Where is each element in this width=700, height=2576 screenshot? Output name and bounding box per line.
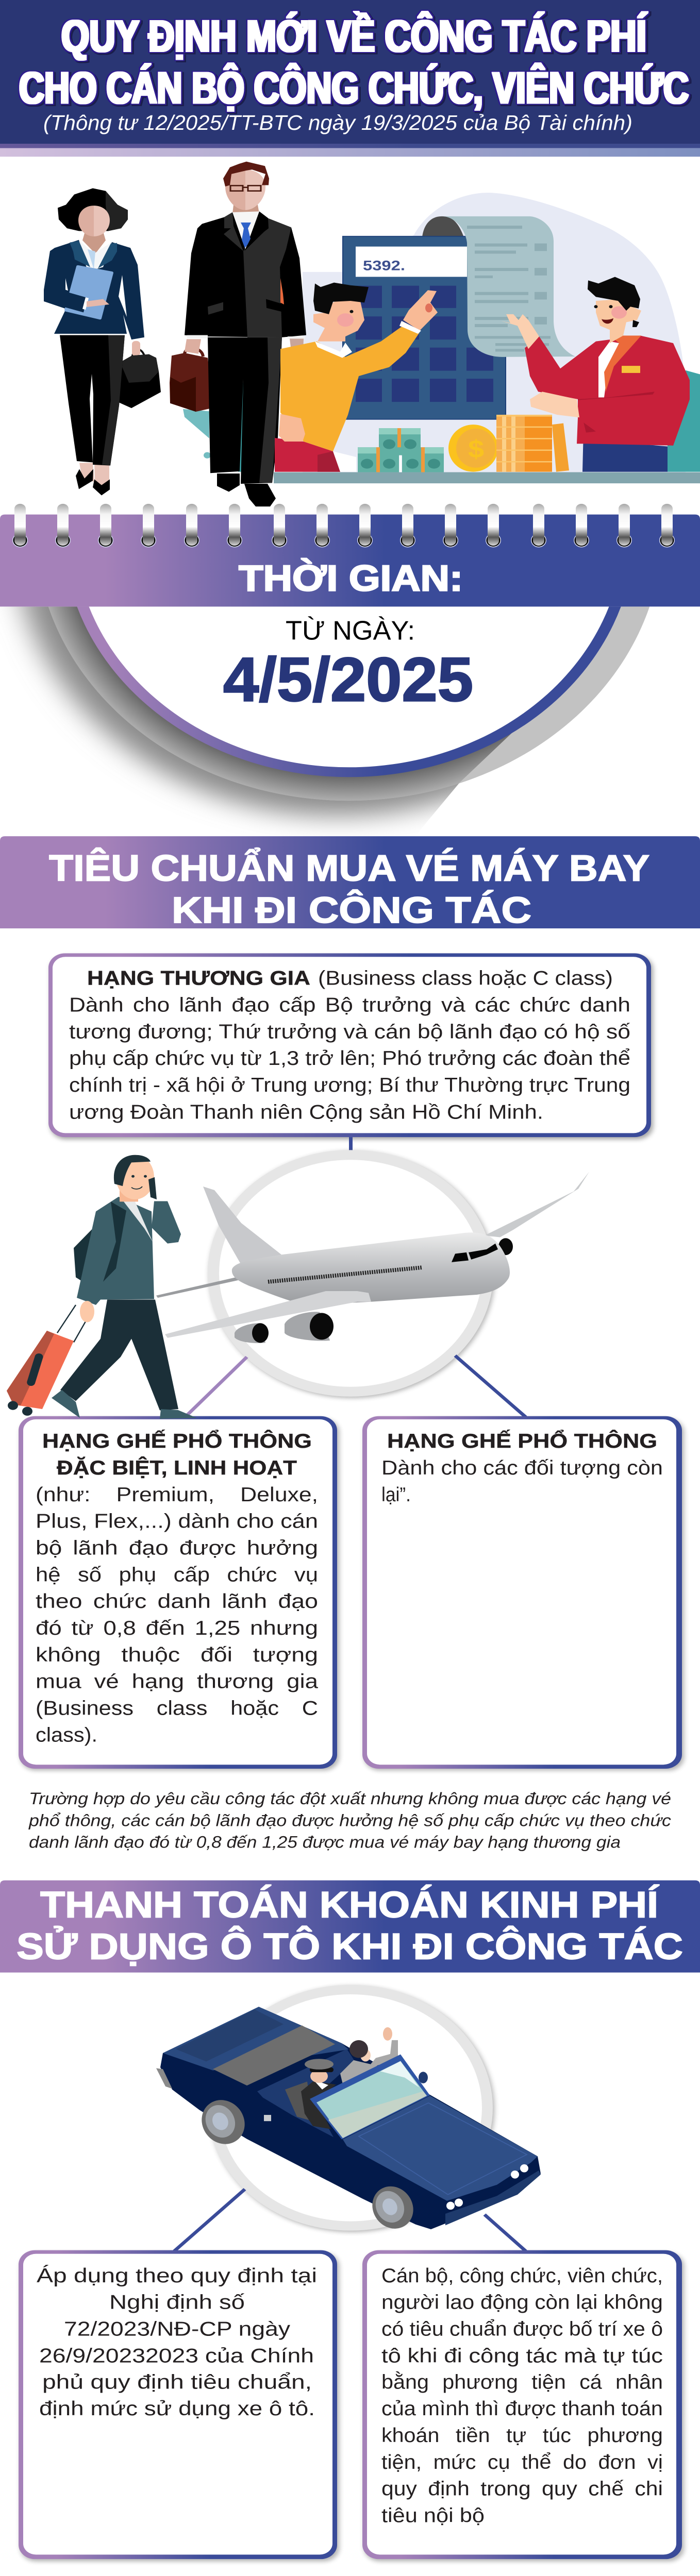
note: urgent travel exception [28,1789,671,1852]
section banner: car allowance: THANH TOÁN KHOÁN KINH PHÍ [40,1884,659,1925]
panel: vehicle decree [19,2250,339,2561]
heading: ĐẶC BIỆT, LINH HOẠT [57,1456,297,1479]
heading: (Business class hoặc C class) [318,967,613,989]
date: 4/5/2025 [223,645,473,714]
description: (Business class hoặc C [36,1697,318,1719]
note: urgent travel exception: phổ thông, các cán bộ lãnh đạo được hưởng hệ số phụ cấp chức vụ theo chức [28,1811,671,1830]
description: bộ lãnh đạo được hưởng [36,1536,318,1559]
panel: time calendar [0,504,700,834]
section banner: airfare: KHI ĐI CÔNG TÁC [172,889,531,930]
description: 72/2023/NĐ-CP ngày [64,2317,290,2340]
illustration: traveller with suitcase [7,1155,197,1419]
description: phụ cấp chức vụ từ 1,3 trở lên; Phó trưởng các đoàn thể [69,1047,630,1070]
connector: circle to economy [455,1355,526,1417]
calendar banner [0,515,700,606]
driver [301,2059,336,2129]
section banner: car allowance: SỬ DỤNG Ô TÔ KHI ĐI CÔNG TÁC [16,1926,683,1967]
description: Dành cho lãnh đạo cấp Bộ trưởng và các chức danh [69,993,630,1016]
description: Dành cho các đối tượng còn [381,1456,663,1479]
description: tiêu nội bộ [381,2504,485,2527]
description: Plus, Flex,...) dành cho cán [36,1510,318,1532]
figure: man in red jacket [501,277,690,472]
description: bằng phương tiện cá nhân [381,2370,663,2393]
description: khoán tiền tự túc phương [381,2424,663,2446]
illustration: car with passengers [156,2007,541,2232]
heading: HẠNG GHẾ PHỔ THÔNG [387,1429,657,1452]
stack of books [496,415,569,472]
heading: HẠNG GHẾ PHỔ THÔNG [42,1429,312,1452]
figure: woman [44,188,161,495]
description [381,1456,663,1505]
panel: premium economy [19,1416,339,1770]
connector: circle to left panel [174,2189,245,2251]
heading [87,967,613,989]
calculator: 5392. [363,258,405,274]
description: hệ số phụ cấp chức vụ [36,1563,318,1586]
money stacks [358,428,444,472]
calendar rings [12,504,675,548]
subtitle: (Thông tư 12/2025/TT-BTC ngày 19/3/2025 của Bộ Tài chính) [43,111,632,134]
figure: man in black suit [170,162,306,506]
description: Nghị định số [109,2291,245,2313]
illustration: airplane [156,1172,589,1343]
illustration: officials and finance scene [44,162,700,506]
description: tương đương; Thứ trưởng và cán bộ lãnh đạo có hộ số [69,1020,630,1043]
receipt [442,216,575,357]
figure: boy in yellow sweater [275,283,438,472]
title [19,11,689,113]
connector: circle to premium economy [185,1357,247,1417]
background blob and leaves [183,193,700,472]
header panel [0,0,700,157]
description: của mình thì được thanh toán [381,2397,663,2419]
calculator [343,216,506,419]
description: Cán bộ, công chức, viên chức, [381,2264,663,2286]
description: 26/9/20232023 của Chính [39,2344,314,2367]
description: người lao động còn lại không [381,2291,663,2313]
handbag [119,341,161,408]
wheels [196,2096,419,2232]
description: chính trị - xã hội ở Trung ương; Bí thư Thường trực Trung [69,1074,630,1096]
description: (như: Premium, Deluxe, [36,1483,318,1505]
connector: circle to right panel [485,2215,526,2251]
passenger [340,2027,398,2084]
description: class). [36,1723,97,1746]
calendar page circle [77,606,621,777]
coin: $ [468,436,484,463]
windshield [310,2055,430,2140]
from-date label: TỪ NGÀY: [286,615,415,645]
section banner: airfare: TIÊU CHUẨN MUA VÉ MÁY BAY [49,848,649,889]
description [36,1483,319,1746]
description [381,2264,663,2527]
circle behind car [208,1985,494,2232]
description: định mức sử dụng xe ô tô. [39,2397,315,2419]
description: mua vé hạng thương gia [36,1670,319,1692]
description: Áp dụng theo quy định tại [37,2264,317,2286]
circle behind plane [208,1150,495,1398]
heading: HẠNG THƯƠNG GIA [87,967,310,989]
front bumper and lights [445,2164,541,2225]
note: urgent travel exception: Trường hợp do yêu cầu công tác đột xuất nhưng không mua được các hạng vé [29,1789,671,1808]
section banner: airfare [0,836,700,930]
note: urgent travel exception: danh lãnh đạo đó từ 0,8 đến 1,25 được mua vé máy bay hạng thương gia [29,1833,621,1852]
description: ương Đoàn Thanh niên Cộng sản Hồ Chí Minh. [69,1101,543,1123]
calendar shadow [4,606,649,834]
description [37,2264,317,2419]
description: phủ quy định tiêu chuẩn, [42,2370,312,2393]
coin [448,425,498,472]
panel: business class [48,953,653,1139]
description: tiện, mức cụ thể do đơn vị [381,2451,663,2473]
description: không thuộc đối tượng [36,1643,318,1666]
description: có tiêu chuẩn được bố trí xe ô [381,2317,663,2340]
connector: business class to circle [349,1137,353,1151]
table top [274,472,700,483]
description: đó từ 0,8 đến 1,25 nhưng [36,1617,318,1639]
section banner: car allowance [0,1880,700,1973]
panel: self-arranged transport [362,2250,684,2561]
panel: economy [362,1416,684,1770]
description: theo chức danh lãnh đạo [36,1590,318,1612]
description [69,993,630,1123]
heading [42,1429,312,1479]
calendar heading: THỜI GIAN: [239,558,463,599]
hood [343,2096,538,2201]
briefcase [170,339,214,412]
description: tô khi đi công tác mà tự túc [381,2344,663,2367]
description: quy định trong quy chế chi [381,2478,663,2500]
description: lại”. [381,1483,411,1505]
